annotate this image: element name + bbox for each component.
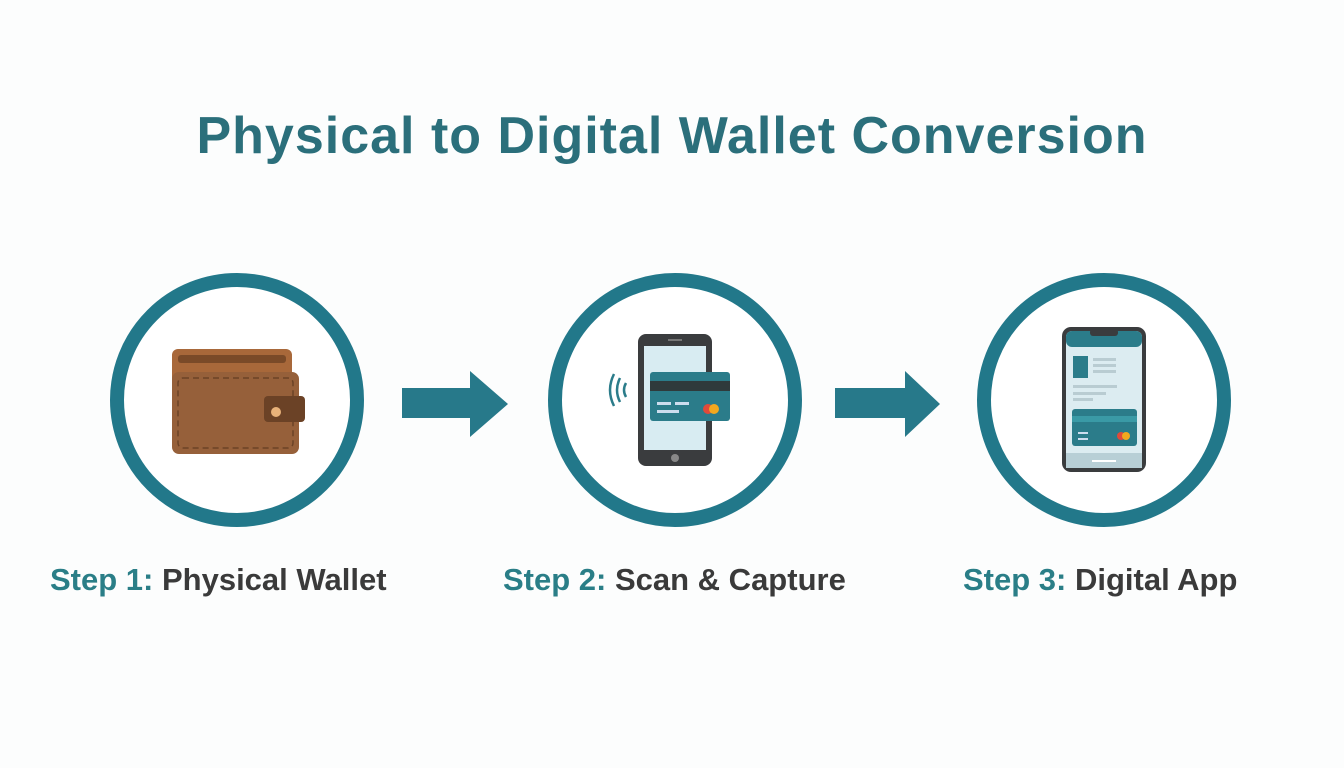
- step 2 circle with phone scanning card: [555, 280, 795, 520]
- label step 1: Step 1: Physical Wallet: [50, 562, 387, 597]
- arrow 1: [402, 371, 508, 437]
- icon: phone app: [1062, 327, 1146, 472]
- icon: wallet: [172, 349, 305, 454]
- label step 3: Step 3: Digital App: [963, 562, 1237, 597]
- arrow 2: [835, 371, 940, 437]
- step 1 circle with wallet: [117, 280, 357, 520]
- label step 2: Step 2: Scan & Capture: [503, 562, 846, 597]
- title: Physical to Digital Wallet Conversion: [196, 107, 1148, 165]
- step 3 circle with digital app: [984, 280, 1224, 520]
- icon: phone with card: [610, 334, 730, 466]
